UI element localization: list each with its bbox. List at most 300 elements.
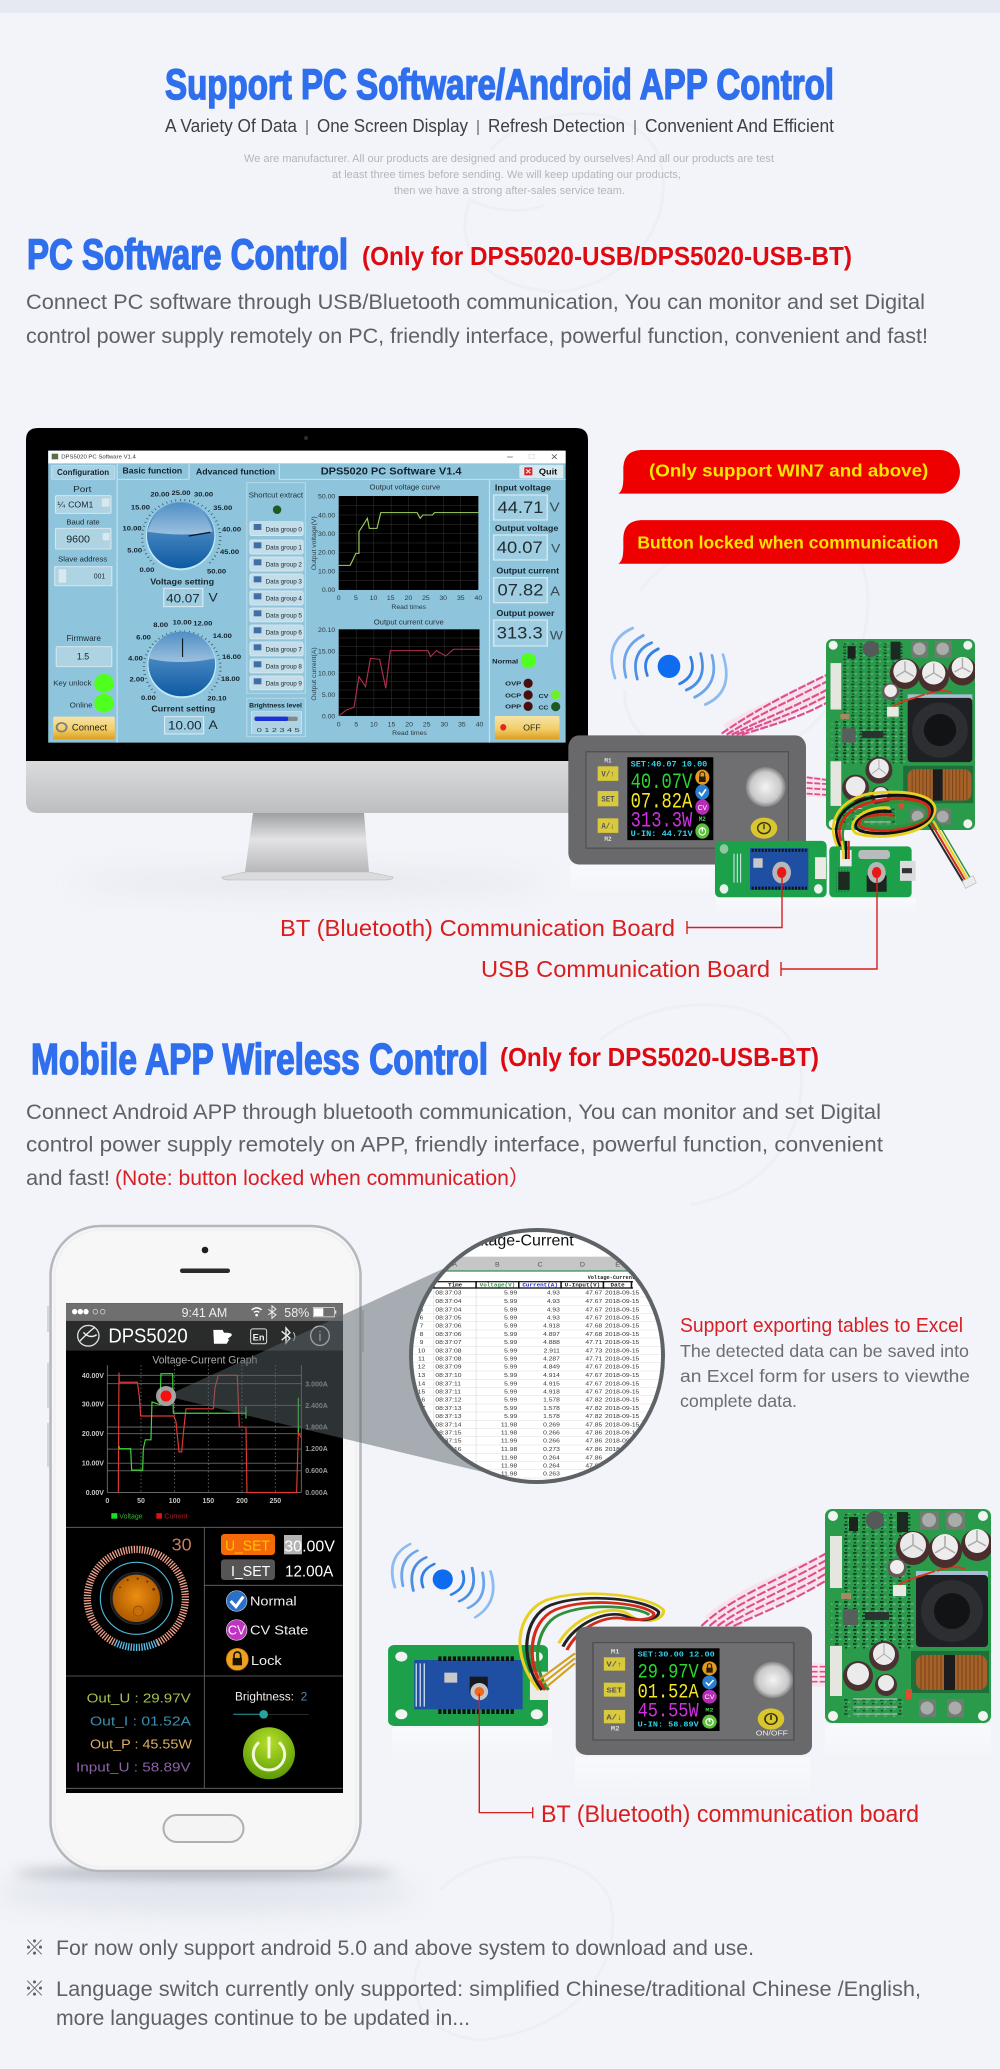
module LCD: 313.3W [631,809,692,834]
voltage knob: 25.00 [171,489,191,497]
label: USB board: USB Communication Board [481,956,770,982]
model note: PC: (Only for DPS5020-USB/DPS5020-USB-BT) [362,241,852,271]
value 30: 30 [172,1535,192,1555]
phone [0,1226,420,1909]
output readings: Input_U : 58.89V [76,1760,191,1775]
dial [87,1549,185,1647]
heading: mobile app: Mobile APP Wireless Control [31,1035,488,1084]
table content: 11.98 [501,1422,518,1428]
voltage knob: 35.00 [213,504,232,512]
port settings: 9600 [66,534,90,545]
module power button 2: ON/OFF [756,1729,788,1737]
brightness slider [233,1690,309,1719]
table content: 08:37:04 [435,1298,462,1305]
excel callout [680,1315,970,1411]
module LCD 2: SET:30.00 12.00 [638,1651,715,1659]
shortcut extract panel: Data group 1 [266,545,302,552]
mobile description: control power supply remotely on APP, friendly interface, powerful function, convenient [26,1134,883,1156]
table content: 5.99 [504,1405,518,1412]
table content: 08:37:07 [435,1339,462,1346]
table content: 4.918 [543,1389,560,1395]
phone shadow [0,1868,420,1909]
output readouts: W [550,628,564,642]
table content: 5.99 [504,1381,518,1387]
voltage-current graph: 1.800A [305,1423,328,1431]
voltage-current graph: 0.00V [86,1489,104,1497]
module LCD [627,757,713,840]
table content: 11.98 [501,1471,518,1477]
key unlock and online leds: Online [70,701,93,709]
table content: 2018-09-15 [605,1323,640,1329]
speaker [180,1268,230,1273]
current chart [311,618,484,737]
voltage chart: 15 [387,595,395,602]
module buttons [598,757,618,843]
table content: 47.68 [585,1331,603,1338]
table content: 14 [418,1381,426,1387]
current knob: 10.00 [173,619,192,627]
reflections [392,1725,991,1799]
side buttons [48,1306,363,1467]
module LCD 2: CV [705,1694,715,1701]
phone body [50,1226,360,1871]
wire connector on USB board [840,841,852,866]
output readouts: Input voltage [495,483,551,493]
table content: E [615,1262,621,1268]
voltage-current graph: 40.00V [82,1372,104,1380]
output readouts [494,483,564,646]
excel callout body [680,1341,970,1411]
voltage chart: Read times [391,604,426,611]
output readouts: Output current [496,566,559,575]
current knob: 2.00 [130,676,144,683]
voltage chart: 20 [405,595,413,602]
table content: C [538,1262,543,1268]
table content: 47.86 [585,1430,603,1436]
table content: 08:37:03 [435,1290,462,1296]
U_SET row: 30.00V [284,1539,336,1556]
table content: Current(A) [522,1282,558,1288]
icon: wireless signal 2 [392,1544,493,1617]
table content: 2018-09-15 [605,1397,640,1403]
subtitle: A Variety Of Data [165,116,298,136]
firmware: 1.5 [77,652,90,662]
quit button: Quit [539,467,557,476]
voltage chart [311,483,483,611]
current knob: 16.00 [222,653,241,661]
module LCD: M2 [699,816,706,823]
module knob 2 [753,1662,793,1698]
status leds: OVP [505,681,521,687]
shortcut extract panel: Data group 5 [266,613,302,620]
current chart: 5 [354,722,359,728]
table content: 47.68 [585,1323,603,1329]
table content: 11.98 [501,1430,518,1436]
callout beam [166,1267,483,1472]
status bar [66,1303,343,1321]
table content: 47.86 [585,1455,603,1461]
power board [826,639,977,830]
voltage chart: 10 [370,595,378,602]
voltage chart: 50.00 [318,494,336,500]
port settings: Port [73,485,92,494]
voltage chart: 30 [439,595,447,602]
table content: 16 [418,1397,426,1403]
current chart: 10.00 [318,671,336,677]
table content: 47.67 [585,1315,603,1321]
voltage-current graph: 250 [269,1497,281,1505]
software window [48,451,566,743]
voltage knob: 30.00 [194,491,213,499]
firmware [56,634,112,667]
current chart: 15.00 [318,649,336,655]
table content: 4.888 [543,1339,560,1346]
table content: 2018-09-15 [605,1339,640,1346]
module buttons: SET [601,796,615,805]
BT board 2 [388,1645,549,1726]
table content: 47.67 [585,1290,603,1296]
current setting: Current setting [151,704,215,713]
U_SET row [221,1534,336,1556]
table content: 2018-09-15 [605,1405,640,1412]
voltage knob: 45.00 [220,548,239,556]
table content: 08:37:06 [435,1323,462,1329]
monitor base [222,872,393,880]
port settings: 001 [94,572,105,581]
heading: PC software control: PC Software Control [27,231,348,279]
voltage-current graph: 200 [236,1497,248,1505]
excel callout body: complete data. [680,1391,797,1411]
voltage chart: 25 [422,595,430,602]
module buttons: A/↓ [601,823,615,832]
table content: 1.578 [543,1413,560,1420]
table content: 2018-09-15 [605,1348,640,1354]
window title bar [48,451,566,463]
table content: Voltage-Current [588,1274,635,1281]
table content: 15 [418,1389,426,1395]
beam origin marker [156,1386,176,1406]
manufacturer note: at least three times before sending. We will keep updating our products, [332,169,681,181]
table content: 47.82 [585,1413,603,1420]
current knob [128,619,241,702]
brightness level [247,698,305,737]
configuration tab: Configuration [57,468,109,477]
subtitle: Convenient And Efficient [645,116,834,136]
status: normal: Normal [250,1594,297,1609]
note 1: For now only support android 5.0 and above system to download and use. [56,1937,754,1960]
voltage-current graph: 3.000A [305,1380,328,1388]
module LCD: U-IN: 44.71V [631,831,693,839]
current chart: 0.00 [322,714,336,720]
table content: 2018-09-15 [605,1315,640,1321]
U_SET row: U_SET [225,1539,270,1555]
output readouts: 07.82 [498,581,543,599]
table content: 4.918 [543,1323,560,1329]
table content: 5.99 [504,1315,518,1321]
tabs and window heading: Advanced function [196,467,275,476]
footnotes [24,1937,921,2030]
table content: 1.578 [543,1405,560,1412]
voltage chart: 0 [337,595,341,602]
shortcut extract panel [247,483,305,693]
current chart: Output current curve [374,618,444,626]
table content: 1.578 [543,1397,560,1403]
table content: 47.86 [585,1446,603,1453]
module LCD: SET:40.07 10.00 [631,761,708,769]
status bar: 9:41 AM [182,1305,227,1320]
voltage-current graph: 2.400A [305,1402,328,1410]
brightness level: Brightness level [249,703,302,709]
panel dividers [66,1527,343,1788]
note 1: ※ [24,1937,45,1960]
lower panels [66,1527,343,1788]
status: CV: CV [228,1624,246,1638]
voltage chart: Output voltage(V) [311,516,318,570]
voltage setting: V [209,590,218,604]
voltage knob: 40.00 [222,526,241,533]
voltage-current graph: 1.200A [305,1445,328,1453]
excel callout body: an Excel form for users to viewthe [680,1366,970,1386]
subtitle [165,116,834,136]
manufacturer note [244,153,774,197]
voltage-current graph: 100 [169,1497,181,1505]
current knob: 4.00 [128,655,143,662]
callout pill: button locked [618,520,960,564]
current knob: 20.10 [207,695,227,702]
manufacturer note: We are manufacturer. All our products are designed and produced by ourselves! And all our products are test [244,153,774,165]
shortcut extract panel: Data group 3 [266,579,302,586]
callout line: BT board 2 [470,1683,533,1818]
table content: 2018-09-15 [605,1331,640,1338]
output readouts: V [550,501,560,515]
tabs and window heading: DPS5020 PC Software V1.4 [321,466,462,477]
home button [164,1815,244,1842]
status bar and graph [66,1303,343,1521]
shortcut extract panel: Data group 4 [266,596,302,603]
connect button [53,717,115,739]
table content: 10 [418,1348,426,1354]
output readouts: A [550,584,561,598]
PC setup hardware group [280,450,977,982]
table content: 12 [418,1364,426,1370]
table content: 2018-09-15 [605,1298,640,1305]
background watermark [415,114,868,2040]
monitor bezel [26,428,588,761]
ribbon cables 2 [701,1550,832,1682]
monitor [26,428,588,890]
current setting: A [209,718,218,732]
table content: 2018-09-15 [605,1446,640,1453]
table content: 5.99 [504,1348,518,1354]
shortcut extract panel: Data group 8 [266,664,302,670]
port settings: ¼ [57,500,66,509]
top strip [0,0,1000,13]
voltage knob: 50.00 [207,568,226,575]
note 2: ※ [24,1978,45,2001]
model note: mobile: (Only for DPS5020-USB-BT) [500,1042,819,1072]
table content: 5.99 [504,1364,518,1370]
table content: 47.67 [585,1364,603,1370]
module buttons 2 [604,1648,625,1732]
phone inner edge [55,1230,356,1867]
shortcut extract panel: Data group 7 [266,647,302,654]
voltage chart: 10.00 [318,569,336,575]
table content: 2018-09-15 [605,1307,640,1313]
table content: 11 [418,1356,426,1362]
module buttons 2: V/↑ [606,1661,622,1669]
PC description [26,291,928,348]
off button: OFF [523,723,541,732]
module LCD 2: 45.55W [638,1699,699,1723]
voltage-current graph: 0.000A [305,1489,328,1497]
table content [404,1231,665,1483]
module buttons: V/↑ [601,771,615,780]
table content: 9 [420,1339,424,1346]
app header [66,1321,343,1351]
power board 2 [825,1509,993,1723]
table content: 08:37:09 [435,1364,462,1370]
firmware: Firmware [67,634,101,643]
table content: 13 [418,1372,426,1379]
voltage chart: 30.00 [318,531,336,538]
status leds: Normal [492,658,518,665]
table content: 0.264 [543,1463,560,1469]
callout line: BT board [687,872,782,934]
module buttons: M2 [604,836,612,843]
shortcut extract panel: Data group 9 [266,681,302,687]
callout pill: WIN7: (Only support WIN7 and above) [649,461,928,481]
note 2: Language switch currently only supported: simplified Chinese/traditional Chinese /English, [56,1978,921,2001]
window title bar: DPS5020 PC Software V1.4 [61,454,136,461]
current knob: 8.00 [153,621,168,629]
voltage chart: 20.00 [318,550,336,557]
table content: 5.99 [504,1290,518,1296]
port settings [55,485,112,586]
port settings: COM1 [68,500,93,509]
callout line: USB board [781,872,877,976]
table content: 4.897 [543,1331,560,1338]
current chart: 15 [388,722,396,728]
status bar: 58% [284,1305,309,1320]
output readouts: 44.71 [498,498,543,517]
current chart: 10 [370,722,378,728]
configuration tab [52,466,115,479]
module buttons 2: SET [606,1687,622,1695]
mobile description: Connect Android APP through bluetooth communication, You can monitor and set Digital [26,1101,881,1124]
window background [48,451,566,743]
table content: 47.82 [585,1397,603,1403]
output readouts: 40.07 [497,538,543,557]
output readouts: V [551,542,561,555]
callout pill: button locked: Button locked when communication [637,533,938,553]
table content: 08:37:12 [435,1397,462,1403]
table content: 47.67 [585,1381,603,1387]
current setting [151,704,218,734]
voltage setting: Voltage setting [150,577,214,586]
status: lock [226,1648,282,1670]
mobile description: (Note: button locked when communication） [115,1167,530,1190]
table content: 0.266 [543,1430,560,1436]
module LCD 2: 29.97V [638,1660,699,1684]
quit button [519,465,563,478]
table content: 4.93 [547,1307,560,1313]
voltage setting: 40.07 [166,591,200,605]
current chart: 25 [423,722,431,728]
PC description: Connect PC software through USB/Bluetooth communication, You can monitor and set Digital [26,291,925,314]
table content: D [580,1262,585,1268]
status: lock: Lock [251,1653,282,1668]
table content: 5.99 [504,1331,518,1338]
output readouts: Output power [496,609,555,618]
table content: U-Input(V) [565,1282,600,1288]
module LCD 2: U-IN: 58.89V [638,1721,699,1729]
power button [243,1727,295,1779]
mobile description [26,1101,883,1190]
output readouts: 313.3 [497,624,543,642]
module LCD: 40.07V [631,770,692,795]
app header: En [253,1332,265,1343]
mobile description: and fast! [26,1167,110,1190]
table content: 08:37:04 [435,1307,462,1313]
display module [568,735,806,865]
shortcut extract panel: Data group 6 [266,630,302,637]
status leds [492,653,561,711]
table content: 2018-09-15 [605,1372,640,1379]
table content: 4.287 [543,1356,560,1362]
table content: 2018-09-15 [605,1381,640,1387]
table content: 08:37:15 [435,1438,462,1444]
note 2: more languages continue to be updated in... [56,2007,470,2030]
current knob: 14.00 [213,632,232,640]
voltage-current graph: 50 [137,1497,145,1505]
table content: 08:37:15 [435,1430,462,1436]
table content: 7 [420,1323,424,1329]
table content: 47.71 [585,1339,603,1346]
table content: 6 [420,1315,424,1321]
current chart: 35 [458,722,466,728]
table content: 4.915 [543,1381,560,1387]
port settings: Slave address [58,555,107,564]
table content: Date [611,1282,626,1288]
label: BT board 2: BT (Bluetooth) communication board [541,1801,919,1828]
status leds: OPP [505,704,521,710]
module LCD: 07.82A [631,790,692,815]
screen [66,1303,343,1793]
note 2 [24,1978,921,2030]
table content: 2018-09-15 [605,1430,640,1436]
current chart: 5.00 [322,692,336,699]
table content: 5.99 [504,1339,518,1346]
module buttons: M1 [604,757,612,765]
voltage chart: 5 [354,595,358,602]
brightness level: 0 1 2 3 4 5 [257,727,301,734]
table content: 8 [420,1331,424,1338]
voltage-current graph: 0.600A [305,1467,328,1475]
status: CV: CV State [250,1623,308,1638]
table content: 0.269 [543,1422,560,1428]
monitor stand [245,813,369,872]
table content: 11.98 [501,1463,518,1469]
table content: 17 [418,1405,426,1412]
voltage-current graph: Current [164,1513,188,1521]
table content: 08:37:06 [435,1331,462,1338]
output readings: Out_P : 45.55W [90,1737,192,1752]
status: CV [226,1620,308,1640]
table content: 5.99 [504,1323,518,1329]
table content: Voltage(V) [480,1282,515,1288]
table content: 08:37:10 [435,1372,462,1379]
current chart: Read times [392,730,427,737]
